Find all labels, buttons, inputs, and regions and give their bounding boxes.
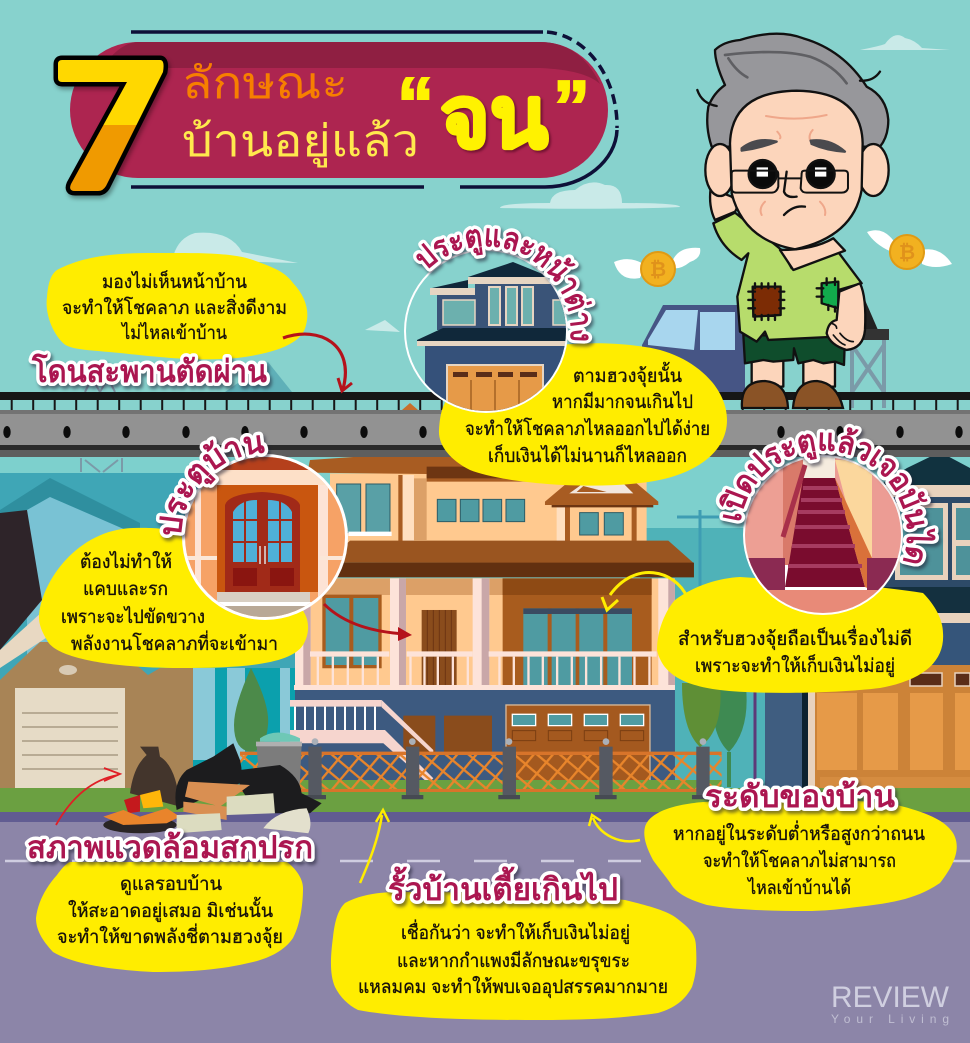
bubble: house level text: ไหลเข้าบ้านได้ bbox=[746, 877, 851, 899]
flying coin right bbox=[867, 230, 952, 269]
distant pole bbox=[677, 510, 720, 592]
deck bbox=[0, 410, 970, 445]
bitcoin symbol: ₿ bbox=[650, 259, 666, 281]
bubble: window text bbox=[465, 362, 710, 467]
pylon under character bbox=[845, 300, 889, 408]
bubble: environment bbox=[36, 862, 303, 972]
bubble: door text: ต้องไม่ทำให้ bbox=[80, 551, 172, 573]
inset garage door bbox=[447, 365, 543, 415]
inset steps bbox=[217, 592, 310, 602]
bubble: environment text: จะทำให้ขาดพลังชี่ตามฮวงจุ้ย bbox=[57, 923, 283, 949]
bubble: fence text: และหากกำแพงมีลักษณะขรุขระ bbox=[397, 950, 630, 973]
bubble: door text: พลังงานโชคลาภที่จะเข้ามา bbox=[71, 630, 278, 655]
inset left panel bbox=[783, 459, 805, 565]
fence posts bbox=[304, 738, 714, 799]
white paper bag bbox=[263, 808, 310, 833]
main house bbox=[290, 453, 694, 787]
bubble: bridge text: จะทำให้โชคลาภ และสิ่งดีงาม bbox=[62, 294, 287, 319]
inset floor bbox=[768, 590, 878, 613]
heading: fence: รั้วบ้านเตี้ยเกินไป bbox=[388, 866, 618, 907]
deck underside bbox=[0, 445, 970, 450]
dark red arrow to door bbox=[324, 604, 405, 634]
right windows bbox=[523, 608, 632, 685]
yellow arrow to fence right bbox=[593, 818, 640, 841]
bubble: house level text: จะทำให้โชคลาภไม่สามารถ bbox=[703, 849, 896, 872]
right brown section bbox=[503, 578, 652, 687]
bubble: fence text: เชื่อกันว่า จะทำให้เก็บเงินไม่อยู่ bbox=[401, 919, 630, 944]
yellow arrow head right bbox=[589, 815, 601, 826]
logo word: REVIEW bbox=[831, 981, 950, 1014]
small wooden doors bbox=[403, 716, 492, 753]
bubble: door text bbox=[61, 551, 278, 655]
inset eave bbox=[417, 341, 570, 346]
balcony door bbox=[422, 610, 457, 685]
balcony rail bbox=[294, 651, 675, 690]
raised arm bbox=[710, 188, 737, 220]
bubble: door text: แคบและรก bbox=[83, 579, 168, 600]
upper wall bbox=[880, 497, 970, 587]
inset right wall bbox=[835, 455, 905, 565]
inset handrail bbox=[783, 465, 805, 537]
background: sky bbox=[0, 0, 970, 470]
hair strand bbox=[725, 52, 847, 83]
inset cream band bbox=[215, 470, 326, 485]
tree right bbox=[682, 683, 721, 747]
shirt bbox=[713, 213, 862, 342]
inset left roof bbox=[432, 280, 468, 288]
inset circle: stairs bbox=[743, 455, 905, 615]
bubble: stairs text: เพราะจะทำให้เก็บเงินไม่อยู่ bbox=[695, 653, 895, 677]
patch green bbox=[817, 278, 838, 312]
wing left bbox=[867, 230, 893, 252]
yellow arrow to balcony bbox=[610, 573, 687, 597]
black bag middle bbox=[175, 743, 242, 810]
under-bridge pylon bbox=[81, 458, 122, 472]
lawn bbox=[0, 788, 970, 812]
inset stairs bbox=[785, 478, 865, 587]
porch stairs bbox=[290, 700, 433, 783]
vegetables bbox=[124, 795, 140, 813]
roof peak behind bridge bbox=[402, 403, 418, 410]
roof trim bbox=[0, 612, 55, 668]
bubble: bridge text: มองไม่เห็นหน้าบ้าน bbox=[102, 269, 247, 293]
title text line 2: บ้านอยู่แล้ว bbox=[182, 117, 419, 168]
wooden garage bbox=[808, 665, 970, 790]
trees bbox=[234, 668, 747, 787]
brown bag bbox=[130, 747, 180, 807]
banner pill bbox=[70, 42, 608, 178]
bubble: window text: จะทำให้โชคลาภไหลออกไปได้ง่าย bbox=[465, 417, 710, 440]
road bbox=[0, 822, 970, 1043]
bubble: fence text: แหลมคม จะทำให้พบเจออุปสรรคมากมาย bbox=[358, 976, 668, 999]
neighbour gable bbox=[27, 497, 133, 680]
mouth bbox=[784, 206, 805, 215]
garbage pile bbox=[103, 732, 322, 833]
trash can bbox=[256, 732, 302, 793]
wing right bbox=[922, 249, 952, 267]
eyebrow right bbox=[811, 140, 845, 152]
bubble: window bbox=[439, 343, 727, 486]
black bag right bbox=[239, 765, 322, 813]
yellow arrow to fence left bbox=[360, 815, 382, 883]
bubble: bridge text bbox=[62, 269, 287, 344]
wing right bbox=[672, 248, 700, 268]
wing left bbox=[614, 259, 645, 279]
inset left wall bbox=[745, 468, 783, 602]
tree left bbox=[234, 668, 268, 752]
windows bbox=[895, 503, 970, 580]
heading: house level: ระดับของบ้าน bbox=[705, 779, 895, 814]
garage door bbox=[506, 705, 650, 785]
curved heading: window and doors: ประตูและหน้าต่าง bbox=[413, 224, 600, 349]
newspaper bundles bbox=[177, 793, 275, 833]
closing quote: ” bbox=[553, 65, 590, 148]
garage door bbox=[15, 688, 125, 788]
hair flyaways bbox=[697, 72, 880, 106]
road dashes bbox=[5, 860, 970, 862]
garbage puddle bbox=[103, 817, 177, 833]
columns bbox=[295, 578, 675, 687]
bubble: fence text bbox=[358, 919, 668, 999]
red arrow to bridge bbox=[283, 334, 345, 389]
eye highlights bbox=[757, 167, 826, 177]
windows dormer bbox=[580, 513, 623, 535]
cream band lower bbox=[800, 613, 970, 623]
bitcoin symbol: ₿ bbox=[899, 242, 915, 264]
forehead wrinkle bbox=[761, 115, 827, 215]
fence lawn strip bbox=[240, 780, 722, 790]
top roof bbox=[307, 453, 643, 482]
bubble: house level text: หากอยู่ในระดับต่ำหรือสูงกว่าถนน bbox=[673, 820, 925, 845]
inset columns bbox=[195, 485, 328, 600]
bubble: house level bbox=[644, 799, 957, 911]
bubble: stairs text: สำหรับฮวงจุ้ยถือเป็นเรื่องไม่ดี bbox=[678, 625, 912, 651]
heading: environment: สภาพแวดล้อมสกปรก bbox=[27, 830, 313, 865]
title banner bbox=[58, 32, 617, 191]
shorts bbox=[743, 335, 845, 365]
bubble: stairs bbox=[657, 577, 943, 693]
coin bbox=[641, 252, 675, 286]
clouds bbox=[173, 35, 950, 332]
banner outline bbox=[131, 32, 617, 187]
red arrow to garbage bbox=[56, 775, 118, 825]
lower shadow band bbox=[323, 578, 503, 595]
glasses bbox=[732, 171, 848, 193]
bridge bbox=[0, 392, 970, 457]
inset step treads bbox=[788, 488, 862, 566]
coin bbox=[890, 235, 924, 269]
lower background bbox=[0, 457, 970, 797]
dark band bbox=[800, 587, 970, 613]
hair bbox=[707, 34, 888, 147]
title text line 1: ลักษณะ bbox=[182, 59, 348, 108]
red arrow head bbox=[338, 378, 352, 391]
bubble: stairs text bbox=[678, 625, 912, 677]
column shadows bbox=[303, 578, 675, 687]
nose bbox=[784, 172, 797, 197]
ground floor navy base bbox=[295, 690, 675, 787]
right arm bbox=[827, 283, 865, 350]
upper walls bbox=[330, 473, 647, 545]
eyebrow left bbox=[742, 140, 777, 151]
yellow arrow head left bbox=[376, 810, 389, 822]
ear left bbox=[705, 144, 735, 196]
collar skin bbox=[780, 238, 845, 270]
lawn and road bbox=[0, 788, 970, 1043]
eye left bbox=[749, 160, 777, 188]
teal facade bbox=[193, 668, 295, 790]
bubble: bridge text: ไม่ไหลเข้าบ้าน bbox=[120, 322, 227, 344]
ear right bbox=[858, 144, 889, 196]
opening quote: “ bbox=[397, 62, 434, 145]
inset door bbox=[225, 492, 300, 592]
title emphasised word: จน bbox=[440, 70, 548, 166]
left window bbox=[322, 595, 382, 668]
right house roof bbox=[880, 452, 970, 490]
navy band bbox=[800, 623, 970, 665]
flying coin left bbox=[614, 248, 700, 286]
house wall bbox=[0, 642, 193, 790]
bubble: bridge bbox=[47, 253, 307, 359]
logo bbox=[831, 981, 950, 1026]
red arrow head garbage bbox=[104, 768, 120, 781]
left house bbox=[0, 510, 193, 790]
windows centre bbox=[437, 499, 525, 522]
inset windows bbox=[443, 287, 570, 325]
bubble: fence bbox=[331, 892, 696, 1020]
inset top beam bbox=[222, 457, 308, 470]
legs bbox=[752, 357, 835, 387]
inset wainscot bbox=[743, 558, 905, 595]
lamp pole bbox=[754, 688, 756, 785]
tree far right bbox=[712, 687, 747, 787]
bubble: environment text bbox=[57, 874, 283, 949]
inset door surround bbox=[217, 485, 320, 592]
shingle roof bbox=[0, 510, 42, 650]
fingers bbox=[832, 323, 853, 345]
dormer roof bbox=[545, 483, 658, 507]
big number 7 bbox=[58, 60, 164, 191]
side wall bbox=[765, 665, 802, 790]
bubble: door bbox=[39, 528, 308, 668]
inset roof trim bbox=[430, 277, 550, 295]
inset upper wall bbox=[437, 284, 570, 330]
curved heading: front door: ประตูบ้าน bbox=[156, 432, 272, 543]
main roof bbox=[327, 541, 694, 577]
face bbox=[730, 91, 863, 249]
patch brown bbox=[748, 283, 784, 320]
character: old man bbox=[697, 34, 889, 387]
lattice bbox=[240, 753, 722, 790]
background skyline behind bridge bbox=[85, 362, 292, 392]
bubble: window text: หากมีมากจนเกินไป bbox=[552, 391, 693, 413]
yellow arrow head bbox=[602, 597, 618, 610]
inset circle: window and doors bbox=[404, 249, 570, 415]
lamp bbox=[59, 665, 77, 675]
character shoes in front of rail bbox=[742, 381, 843, 408]
top rail bbox=[0, 392, 970, 400]
deck bolts bbox=[3, 426, 963, 438]
inset lower roof bbox=[417, 328, 570, 341]
bubble: house level text bbox=[673, 820, 925, 899]
window group upper left bbox=[337, 484, 392, 536]
inset circle: front door bbox=[182, 454, 348, 620]
curved heading: stairs: เปิดประตูแล้วเจอบันได bbox=[716, 424, 942, 572]
logo tagline: Your Living bbox=[831, 1012, 949, 1026]
lower floor wall bbox=[303, 578, 675, 687]
inset rails bbox=[183, 556, 347, 560]
inset top opening bbox=[803, 457, 835, 478]
fence bbox=[240, 738, 722, 799]
car behind character bbox=[642, 305, 745, 392]
inset sky bbox=[404, 250, 568, 414]
bubble: window text: เก็บเงินได้ไม่นานก็ไหลออก bbox=[488, 443, 687, 467]
eye right bbox=[807, 160, 835, 188]
rail posts bbox=[11, 400, 970, 410]
window tops bbox=[523, 608, 632, 614]
inset top roof bbox=[468, 262, 550, 277]
fence rails bbox=[240, 752, 722, 792]
bubble: environment text: ให้สะอาดอยู่เสมอ มิเช่นนั้น bbox=[68, 897, 273, 922]
bubble: door text: เพราะจะไปขัดขวาง bbox=[61, 606, 205, 628]
bubble: environment text: ดูแลรอบบ้าน bbox=[120, 874, 222, 895]
road edge bbox=[0, 812, 970, 822]
cream band bbox=[880, 485, 970, 497]
cardboard box bbox=[183, 782, 250, 820]
neighbour roof band bbox=[0, 478, 140, 600]
right house bbox=[755, 452, 970, 790]
inset wall bbox=[183, 455, 347, 620]
bubble: window text: ตามฮวงจุ้ยนั้น bbox=[573, 362, 682, 388]
heading: bridge: โดนสะพานตัดผ่าน bbox=[31, 353, 267, 389]
dark red arrow head bbox=[398, 627, 412, 641]
inset lower wall bbox=[425, 346, 570, 414]
